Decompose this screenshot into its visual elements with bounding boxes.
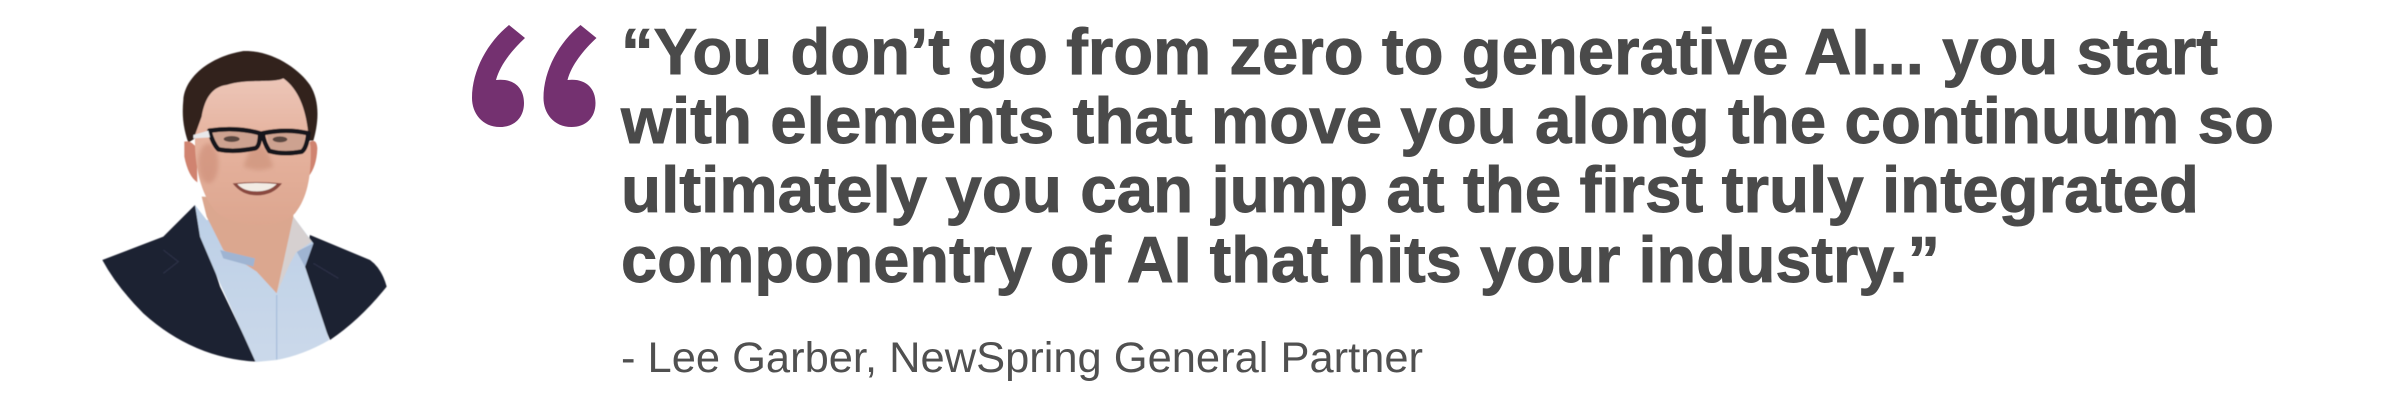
neck and chest: [202, 197, 293, 293]
temple: [193, 131, 210, 138]
hair: [183, 51, 317, 143]
collar: [220, 243, 313, 267]
quote text: [620, 15, 2274, 296]
line 1: “You don’t go from zero to generative AI... you start: [621, 15, 2218, 88]
frames: [209, 129, 308, 153]
face: [195, 78, 311, 225]
cheek shading: [198, 143, 218, 183]
right mark: [544, 25, 596, 127]
glasses: [193, 129, 308, 153]
collar white: [277, 217, 312, 293]
mouth: [233, 182, 282, 195]
lapel highlights: [163, 250, 338, 278]
eyes: [224, 136, 240, 142]
jacket: [102, 205, 387, 362]
nose shadow: [243, 145, 273, 170]
lenses: [210, 132, 305, 152]
attribution: - Lee Garber, NewSpring General Partner: [621, 334, 1423, 382]
quotation mark: [472, 25, 596, 127]
line 4: componentry of AI that hits your industry.”: [621, 223, 1940, 296]
line 3: ultimately you can jump at the first truly integrated: [621, 153, 2199, 226]
ears: [184, 141, 317, 182]
left mark: [472, 25, 525, 127]
portrait photo: [102, 51, 387, 362]
shirt placket: [275, 295, 279, 359]
shirt: [195, 205, 329, 362]
teeth: [237, 183, 277, 191]
line 2: with elements that move you along the continuum so: [620, 84, 2274, 157]
